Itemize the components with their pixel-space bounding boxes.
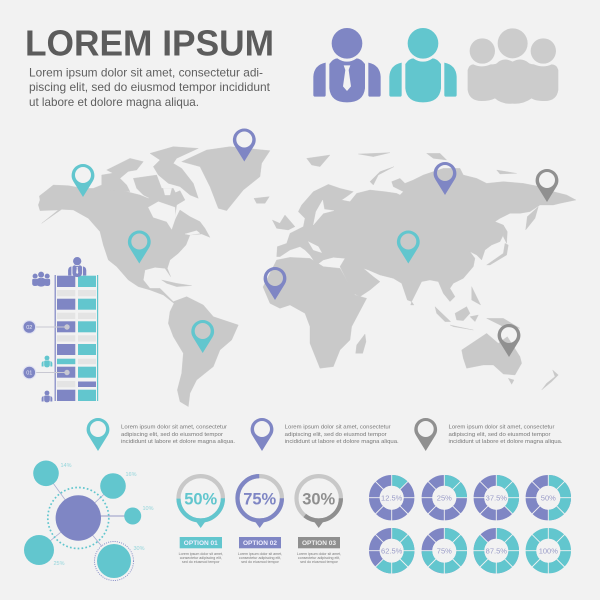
donut 87.5% — [473, 528, 519, 574]
option 03 text — [297, 552, 341, 564]
bubble 30%: 30% — [133, 546, 145, 552]
donut 50% — [525, 475, 571, 521]
option 03 text: consectetur adipiscing elit, — [298, 556, 340, 560]
option 01 label: OPTION 01 — [184, 540, 218, 547]
legend row — [87, 418, 563, 451]
gauge option 02 — [238, 476, 282, 564]
map pins — [72, 128, 558, 357]
intro text: ut labore et dolore magna aliqua. — [29, 95, 199, 109]
legend text 2: incididunt ut labore et dolore magna aliqua. — [285, 439, 399, 445]
table chart — [22, 257, 98, 402]
donut 37.5%: 37.5% — [486, 493, 507, 502]
legend text 1: adipiscing elit, sed do eiusmod tempor — [121, 432, 223, 438]
option 01 text: Lorem ipsum dolor sit amet, — [179, 552, 223, 556]
icon: chart teal person — [42, 356, 52, 367]
gauge option 01: 50% — [184, 490, 217, 508]
legend text 2: adipiscing elit, sed do eiusmod tempor — [285, 432, 387, 438]
legend text 1: Lorem ipsum dolor sit amet, consectetur — [121, 424, 227, 430]
option 02 text: Lorem ipsum dolor sit amet, — [238, 552, 282, 556]
donut 100% — [525, 528, 571, 574]
option 03 text: sed do eiusmod tempor — [300, 560, 339, 564]
legend text 1 — [121, 424, 235, 445]
pin: russia — [434, 162, 456, 195]
callout 01: 01 — [26, 370, 32, 376]
bubble 14%: 14% — [60, 463, 72, 469]
pin: west africa — [264, 267, 286, 300]
donut 62.5% — [369, 528, 415, 574]
legend text 1: incididunt ut labore et dolore magna aliqua. — [121, 439, 235, 445]
connectors — [39, 473, 133, 561]
callout 02: 02 — [26, 325, 32, 331]
legend pin teal — [87, 418, 109, 451]
intro text: piscing elit, sed do eiusmod tempor incididunt — [29, 80, 271, 94]
pin: australia — [498, 324, 520, 357]
dotted ring — [48, 488, 109, 548]
donut 37.5% — [473, 475, 519, 521]
option 02 text: sed do eiusmod tempor — [241, 560, 280, 564]
option 01 text: sed do eiusmod tempor — [182, 560, 220, 564]
option 03 label: OPTION 03 — [302, 540, 336, 547]
legend pin gray — [414, 418, 437, 451]
donut 75% — [421, 528, 467, 574]
map: eurasia, africa and oceania — [263, 153, 576, 390]
icon: chart purple person — [42, 391, 52, 402]
icon: businessman — [313, 28, 381, 102]
intro text — [29, 66, 271, 109]
option 03 text: Lorem ipsum dolor sit amet, — [297, 552, 341, 556]
option 01 text — [179, 552, 223, 564]
pin: brazil — [191, 320, 214, 353]
bubble 25%: 25% — [53, 561, 65, 567]
bubble chart — [24, 460, 154, 580]
donut 12.5%: 12.5% — [381, 493, 403, 502]
callout 01 — [22, 366, 70, 380]
legend text 3: adipiscing elit, sed do eiusmod tempor — [448, 432, 551, 438]
gauge option 03: 30% — [302, 490, 335, 508]
gauge option 02: 75% — [243, 490, 276, 508]
option 01 text: consectetur adipiscing elit, — [180, 556, 222, 560]
option 02 text: consectetur adipiscing elit, — [239, 556, 281, 560]
chart cells — [57, 276, 96, 401]
gauge option 03 — [296, 476, 341, 564]
intro text: Lorem ipsum dolor sit amet, consectetur adi- — [29, 66, 263, 80]
legend text 3: incididunt ut labore et dolore magna aliqua. — [448, 439, 563, 445]
pin: usa — [128, 230, 151, 264]
chart axes — [55, 275, 98, 401]
callout 02 — [22, 320, 70, 334]
donut 62.5%: 62.5% — [381, 546, 403, 555]
icon: chart group — [32, 272, 50, 287]
world map — [38, 147, 576, 407]
legend text 2 — [285, 424, 399, 445]
legend text 3 — [448, 424, 563, 445]
donut 87.5%: 87.5% — [486, 546, 507, 555]
legend text 3: Lorem ipsum dolor sit amet, consectetur — [448, 424, 555, 430]
pin: alaska — [72, 164, 94, 197]
option 02 text — [238, 552, 282, 564]
map: americas and greenland — [38, 147, 295, 407]
bubble 10%: 10% — [142, 506, 154, 512]
hub — [56, 495, 101, 541]
donut 25%: 25% — [437, 493, 452, 502]
pin: greenland — [233, 128, 256, 162]
legend text 2: Lorem ipsum dolor sit amet, consectetur — [285, 424, 391, 430]
gauge option 01 — [178, 476, 223, 564]
legend pin purple — [251, 418, 273, 451]
donut 50%: 50% — [541, 493, 556, 502]
title: LOREM IPSUM — [25, 22, 274, 64]
donut 25% — [421, 475, 467, 521]
pin: far east — [536, 169, 558, 202]
pin: central asia — [397, 230, 420, 264]
icon: chart top person — [68, 257, 86, 277]
donut 12.5% — [369, 475, 415, 521]
icon: person — [389, 28, 457, 102]
donut grid — [369, 475, 571, 574]
donut 100%: 100% — [539, 546, 558, 555]
donut 75%: 75% — [437, 546, 452, 555]
bubble 16%: 16% — [125, 472, 137, 478]
icon: group of people — [468, 28, 558, 104]
option 02 label: OPTION 02 — [243, 540, 277, 547]
